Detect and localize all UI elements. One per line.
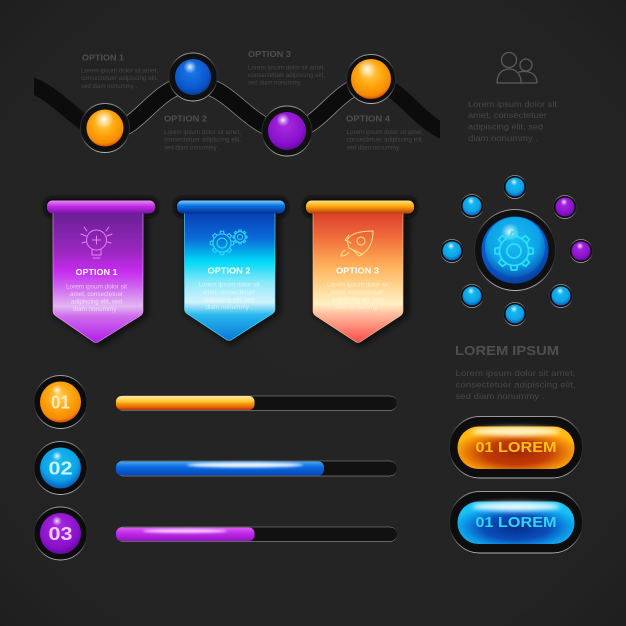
icon: light bulb: [81, 227, 112, 258]
badge 03: 03: [48, 524, 72, 544]
heading: OPTION 2: [208, 266, 251, 276]
ribbon body: [184, 213, 275, 340]
option 1 text: Lorem ipsum dolor sit amet,: [81, 68, 158, 74]
panel: ribbon option 2: [174, 197, 288, 346]
description: [327, 282, 388, 311]
lorem ipsum text: [456, 368, 576, 401]
option 3 text: sed diam nonummy .: [248, 80, 304, 86]
ribbon body: [313, 213, 403, 342]
option 3 text: consectetuer adipiscing elit,: [248, 72, 325, 79]
badge 02: 02: [48, 458, 72, 478]
satellite 6: [550, 284, 572, 308]
description: diam nonummy .: [334, 304, 381, 311]
option 4 text: Lorem ipsum dolor sit amet,: [346, 129, 424, 136]
progress row 01: [34, 376, 397, 428]
panel: ribbon option 3: [303, 197, 417, 348]
progress fill: [116, 396, 254, 410]
wave timeline: [14, 53, 460, 156]
lorem ipsum text: sed diam nonummy .: [456, 391, 544, 401]
radial gear diagram: [440, 176, 592, 326]
satellite 3: [440, 240, 464, 262]
description: [198, 282, 260, 311]
option 1 text: consectetuer adipiscing elit,: [81, 75, 158, 82]
option 1 text: sed diam nonummy .: [81, 83, 137, 90]
option 3 text: Lorem ipsum dolor sit amet,: [248, 64, 325, 72]
option 1 text: [81, 52, 158, 90]
button: orange: [450, 416, 582, 478]
option 2 text: Lorem ipsum dolor sit amet,: [164, 129, 241, 136]
heading: OPTION 3: [336, 266, 379, 276]
option 2 text: OPTION 2: [164, 114, 207, 124]
side text block: diam nonummy .: [468, 133, 538, 143]
wave band: [14, 80, 460, 138]
lorem ipsum text: Lorem ipsum dolor sit amet,: [456, 368, 576, 378]
description: Lorem ipsum dolor sit: [327, 282, 388, 288]
node 2: blue sphere: [169, 53, 217, 101]
option 4 text: OPTION 4: [346, 114, 390, 124]
panel: ribbon option 1: [44, 197, 158, 348]
description: [66, 284, 127, 313]
icon: gear: [495, 232, 533, 270]
icon: people: [497, 52, 537, 83]
option 4 text: [346, 114, 424, 152]
description: diam nonummy .: [73, 306, 120, 313]
progress track: [116, 461, 397, 476]
node 4: orange sphere: [346, 54, 396, 104]
badge 01: 01: [51, 392, 70, 412]
progress track: [116, 527, 397, 542]
option 1 text: OPTION 1: [82, 52, 124, 62]
progress fill: [116, 528, 254, 541]
description: adipiscing elit, sed: [71, 298, 122, 306]
description: amet, consectetuer: [202, 289, 256, 296]
description: amet, consectetuer: [70, 291, 124, 298]
description: amet, consectetuer: [331, 289, 385, 296]
option 4 text: consectetuer adipiscing elit,: [346, 136, 424, 144]
node 1: orange sphere: [80, 104, 130, 152]
option 2 text: [164, 114, 241, 152]
option 3 text: [248, 49, 325, 86]
description: adipiscing elit, sed: [204, 296, 255, 304]
wave edge highlight: [108, 84, 371, 131]
description: diam nonummy .: [206, 304, 253, 311]
ribbon bar: [177, 200, 285, 214]
satellite 7: purple: [570, 240, 592, 262]
side text block: [468, 99, 558, 143]
lorem ipsum heading: LOREM IPSUM: [455, 343, 559, 358]
description: Lorem ipsum dolor sit: [198, 282, 260, 288]
central gear sphere: [474, 210, 556, 290]
option 2 text: sed diam nonummy .: [164, 144, 220, 152]
satellite 1: [504, 176, 526, 198]
badge 02: [34, 442, 87, 494]
side text block: Lorem ipsum dolor sit: [468, 99, 558, 109]
button: blue: [450, 492, 582, 553]
progress row 03: [34, 507, 397, 560]
side text block: adipiscing elit, sed: [468, 122, 543, 132]
option 4 text: sed diam nonummy .: [346, 144, 403, 152]
icon: gears: [210, 230, 247, 255]
side text block: amet, consectetuer: [468, 110, 547, 120]
description: adipiscing elit, sed: [332, 296, 383, 304]
satellite 2: [460, 194, 484, 218]
option 3 text: OPTION 3: [248, 49, 291, 59]
button: orange: 01 LOREM: [476, 439, 556, 456]
ribbon body: [53, 213, 143, 342]
lorem ipsum text: consectetuer adipiscing elit,: [456, 380, 576, 390]
progress fill: [116, 462, 324, 476]
satellite 8: purple: [554, 196, 576, 218]
description: Lorem ipsum dolor sit: [66, 284, 127, 290]
progress row 02: [34, 442, 397, 494]
heading: OPTION 1: [76, 267, 118, 277]
icon: rocket: [341, 231, 373, 256]
button: blue: 01 LOREM: [476, 514, 556, 531]
badge 01: [34, 376, 87, 428]
satellite 5: [504, 302, 526, 326]
progress track: [116, 396, 397, 410]
ribbon bar: [47, 200, 155, 214]
node 3: purple sphere: [262, 106, 312, 156]
satellite 4: [460, 284, 484, 308]
option 2 text: consectetuer adipiscing elit,: [164, 136, 241, 144]
badge 03: [34, 507, 87, 560]
ribbon bar: [306, 200, 414, 214]
